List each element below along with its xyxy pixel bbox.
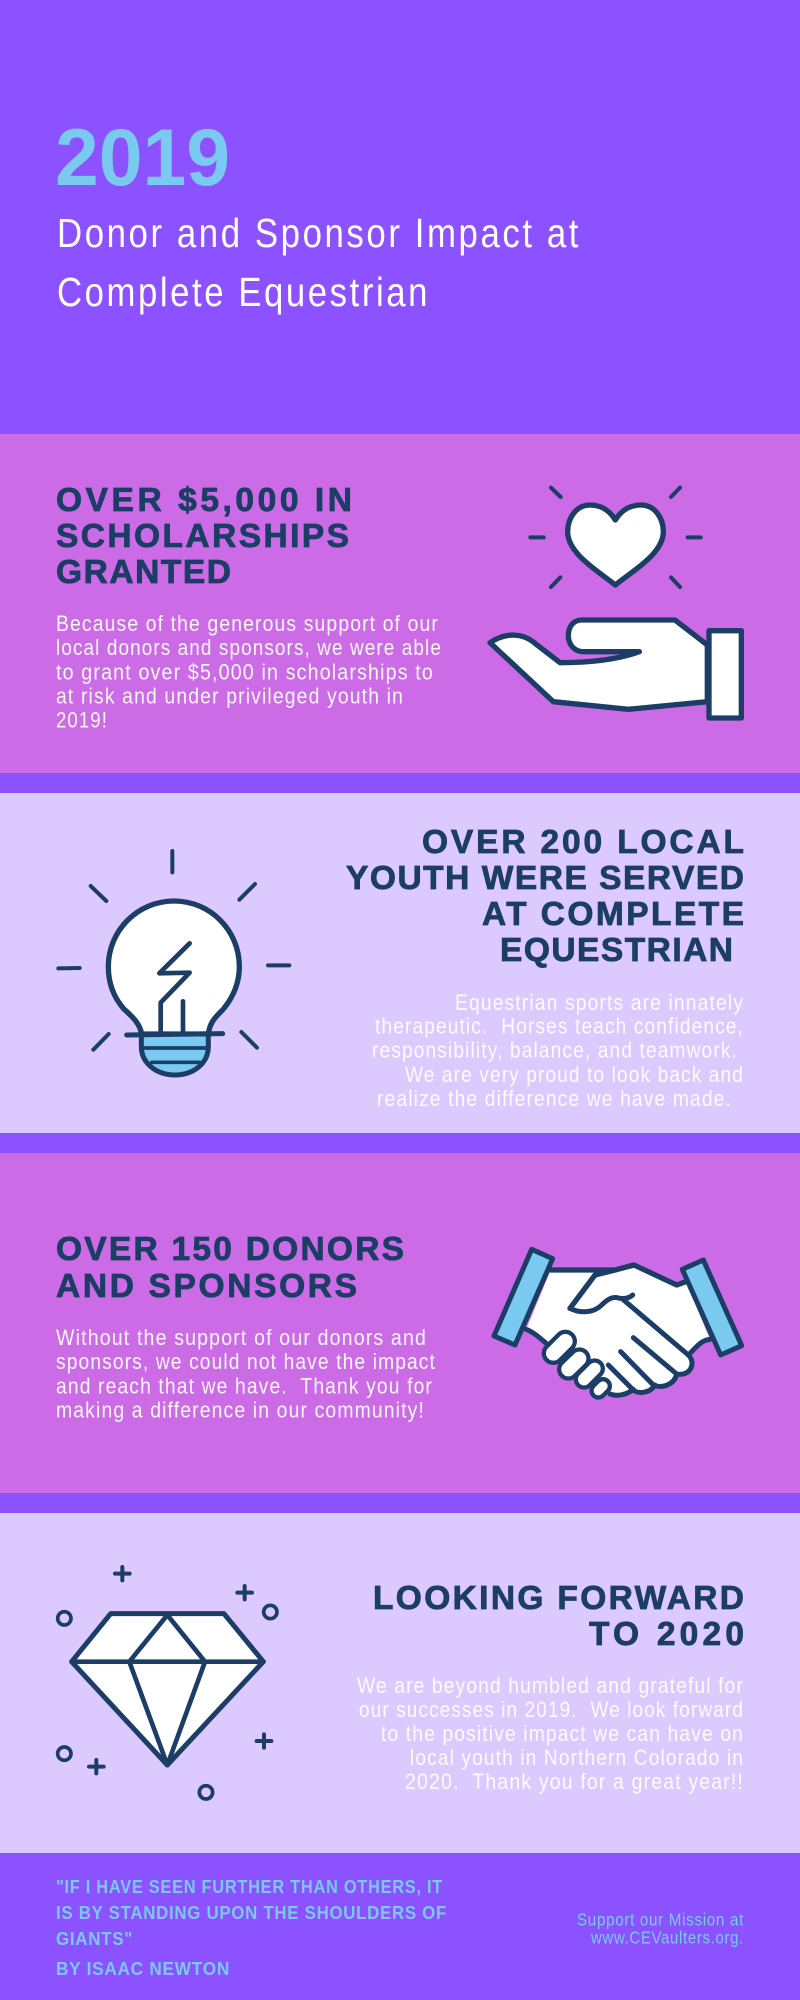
subtitle <box>57 210 581 315</box>
heading: local youth <box>346 824 744 969</box>
panel: scholarships <box>0 434 800 773</box>
panel: looking forward <box>0 1513 800 1853</box>
support link text: www.CEVaulters.org. <box>590 1928 744 1948</box>
panel: footer <box>0 1853 800 2000</box>
body text: local youth: Equestrian sports are innately <box>455 990 744 1015</box>
heading: looking forward: TO 2020 <box>589 1616 744 1653</box>
body text: looking forward: local youth in Northern Colorado in <box>410 1745 744 1770</box>
body text: donors: and reach that we have. Thank you for <box>56 1374 433 1398</box>
panel: header <box>0 0 800 434</box>
body text: looking forward: 2020. Thank you for a great year!! <box>405 1769 744 1794</box>
heading: donors <box>56 1231 404 1305</box>
quote: BY ISAAC NEWTON <box>56 1958 230 1979</box>
body text: looking forward: our successes in 2019. We look forward <box>359 1697 744 1722</box>
body text: scholarships: at risk and under privileged youth in <box>56 684 404 708</box>
quote: GIANTS" <box>56 1928 133 1949</box>
body text: donors <box>56 1325 436 1422</box>
body text: scholarships: to grant over $5,000 in scholarships to <box>56 660 434 684</box>
body text: local youth: realize the difference we have made. <box>377 1086 732 1111</box>
body text: local youth: responsibility, balance, and teamwork. <box>372 1038 738 1062</box>
support link text <box>577 1910 744 1948</box>
body text: looking forward <box>357 1673 744 1794</box>
heading: donors: AND SPONSORS <box>56 1268 357 1305</box>
subtitle: Complete Equestrian <box>57 269 430 315</box>
heading: donors: OVER 150 DONORS <box>56 1231 404 1268</box>
quote <box>56 1876 447 1979</box>
subtitle: Donor and Sponsor Impact at <box>57 210 581 256</box>
panel: local youth <box>0 793 800 1133</box>
icon: light bulb <box>58 851 289 1075</box>
title: year 2019: 2019 <box>55 113 230 203</box>
quote: "IF I HAVE SEEN FURTHER THAN OTHERS, IT <box>56 1876 443 1897</box>
body text: scholarships: local donors and sponsors, we were able <box>56 635 442 660</box>
heading: looking forward <box>373 1580 744 1653</box>
body text: donors: Without the support of our donors and <box>56 1325 427 1350</box>
body text: scholarships: 2019! <box>56 708 108 732</box>
heading: local youth: OVER 200 LOCAL <box>422 824 744 861</box>
icon: handshake <box>494 1249 742 1395</box>
body text: donors: making a difference in our community! <box>56 1398 425 1422</box>
body text: looking forward: We are beyond humbled and grateful for <box>357 1673 744 1698</box>
heading: local youth: YOUTH WERE SERVED <box>346 860 744 897</box>
support link text: Support our Mission at <box>577 1910 744 1930</box>
heading: scholarships: OVER $5,000 IN <box>56 482 352 519</box>
body text: local youth: We are very proud to look back and <box>405 1062 744 1087</box>
heading: local youth: EQUESTRIAN <box>500 932 733 969</box>
body text: scholarships <box>56 611 442 732</box>
heading: looking forward: LOOKING FORWARD <box>373 1580 744 1617</box>
body text: looking forward: to the positive impact we can have on <box>381 1721 744 1746</box>
body text: scholarships: Because of the generous support of our <box>56 611 439 636</box>
heading: scholarships: GRANTED <box>56 554 231 591</box>
icon: diamond with sparkles <box>58 1567 277 1799</box>
body text: local youth: therapeutic. Horses teach confidence, <box>375 1014 744 1038</box>
body text: local youth <box>372 990 744 1111</box>
heading: scholarships <box>56 482 352 591</box>
icon: heart in open hand <box>490 488 741 718</box>
heading: scholarships: SCHOLARSHIPS <box>56 518 349 555</box>
quote: IS BY STANDING UPON THE SHOULDERS OF <box>56 1902 447 1923</box>
heading: local youth: AT COMPLETE <box>482 896 744 933</box>
body text: donors: sponsors, we could not have the impact <box>56 1349 436 1374</box>
panel: donors and sponsors <box>0 1153 800 1493</box>
